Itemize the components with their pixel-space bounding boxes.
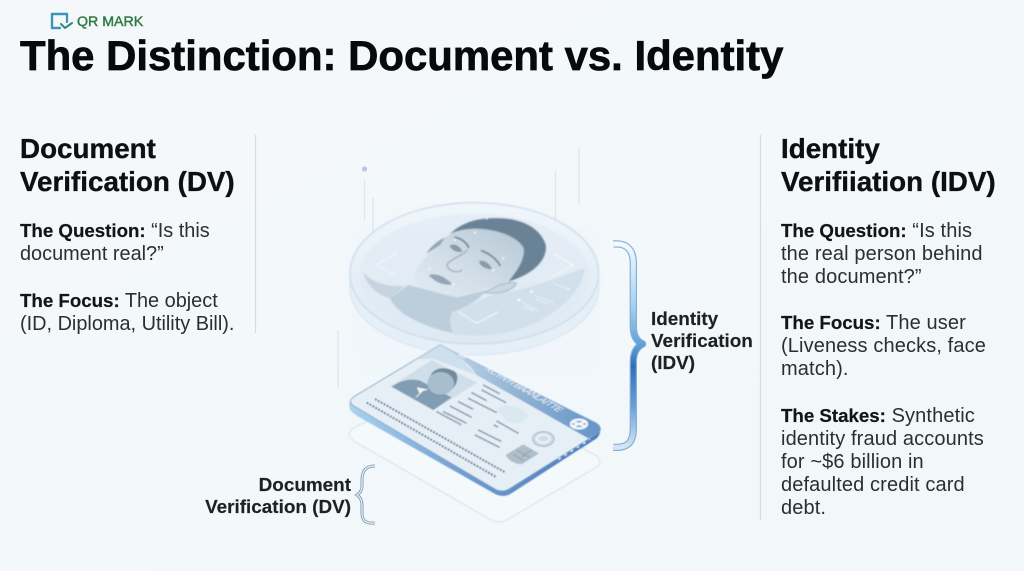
panel: identity verification bbox=[781, 133, 996, 519]
face bbox=[414, 226, 524, 297]
text: DV focus: The Focus: bbox=[20, 290, 120, 311]
text: IDV question: The Question: bbox=[781, 220, 907, 241]
identity verification bracket bbox=[613, 244, 643, 447]
scan readout bbox=[523, 283, 567, 311]
card emblem bbox=[571, 420, 587, 428]
facial features bbox=[429, 237, 500, 284]
heading: identity verification: Identity bbox=[781, 133, 880, 164]
central illustration backdrop bbox=[350, 150, 602, 535]
illustration: face on glass disc bbox=[350, 203, 599, 355]
right shoulder bbox=[450, 268, 585, 336]
header title: XCTNYI BAANLAITTE bbox=[481, 365, 566, 414]
disc lower rim bbox=[350, 218, 599, 355]
seal bbox=[533, 432, 554, 446]
text: DV focus: The object bbox=[125, 290, 218, 312]
label: document verification: Document bbox=[259, 475, 352, 496]
title: The Distinction: Document vs. Identity bbox=[20, 32, 784, 79]
text: DV focus: (ID, Diploma, Utility Bill). bbox=[20, 313, 234, 335]
card face bbox=[351, 345, 600, 491]
left shoulder bbox=[363, 272, 405, 298]
hair bbox=[450, 218, 546, 282]
text: IDV stakes: Synthetic bbox=[892, 405, 975, 427]
card side edge bbox=[349, 402, 600, 496]
heading: document verification: Verification (DV) bbox=[20, 166, 235, 197]
header label: ID bbox=[456, 351, 470, 360]
neck bbox=[390, 285, 487, 333]
label: document verification: Verification (DV) bbox=[205, 497, 351, 518]
accent lines and dot bbox=[338, 147, 579, 388]
text: IDV focus: The Focus: bbox=[781, 312, 881, 333]
heading: identity verification: Verifiiation (IDV) bbox=[781, 166, 996, 197]
text: IDV stakes: identity fraud accounts bbox=[781, 428, 984, 450]
text: IDV question: the document?” bbox=[781, 266, 922, 288]
ear bbox=[485, 282, 517, 293]
text: IDV focus: The user bbox=[886, 312, 966, 334]
header band bbox=[440, 345, 600, 438]
logo: QR Mark bbox=[52, 14, 144, 30]
document verification bracket bbox=[357, 466, 375, 523]
label: identity verification: Verification bbox=[651, 331, 753, 352]
platform below card bbox=[349, 382, 600, 522]
text: IDV question: “Is this bbox=[912, 220, 972, 242]
portrait photo bbox=[390, 360, 477, 411]
machine readable zone bbox=[367, 399, 505, 477]
data fields bbox=[437, 385, 518, 447]
text: DV question: document real?” bbox=[20, 243, 164, 265]
label: identity verification: Identity bbox=[651, 309, 719, 330]
icon: logo document check bbox=[52, 14, 72, 28]
scan brackets bbox=[376, 253, 573, 323]
text: IDV stakes: defaulted credit card bbox=[781, 474, 965, 496]
text: DV question: The Question: bbox=[20, 220, 146, 241]
text: IDV question: the real person behind bbox=[781, 243, 983, 265]
logo wordmark: QR MARK bbox=[77, 14, 144, 30]
label: identity verification: (IDV) bbox=[651, 353, 695, 374]
text: DV question: “Is this bbox=[151, 220, 210, 242]
text: IDV focus: match). bbox=[781, 358, 849, 380]
text: IDV focus: (Liveness checks, face bbox=[781, 335, 986, 357]
illustration: ID card bbox=[349, 345, 600, 522]
text: IDV stakes: The Stakes: bbox=[781, 405, 886, 426]
tracking dots bbox=[428, 217, 573, 301]
edge lights bbox=[558, 439, 590, 459]
security hologram bbox=[497, 406, 528, 423]
panel: document verification bbox=[20, 133, 235, 335]
heading: document verification: Document bbox=[20, 133, 156, 164]
chip bbox=[506, 444, 539, 464]
text: IDV stakes: for ~$6 billion in bbox=[781, 451, 924, 473]
text: IDV stakes: debt. bbox=[781, 497, 826, 519]
disc top surface bbox=[350, 203, 599, 344]
